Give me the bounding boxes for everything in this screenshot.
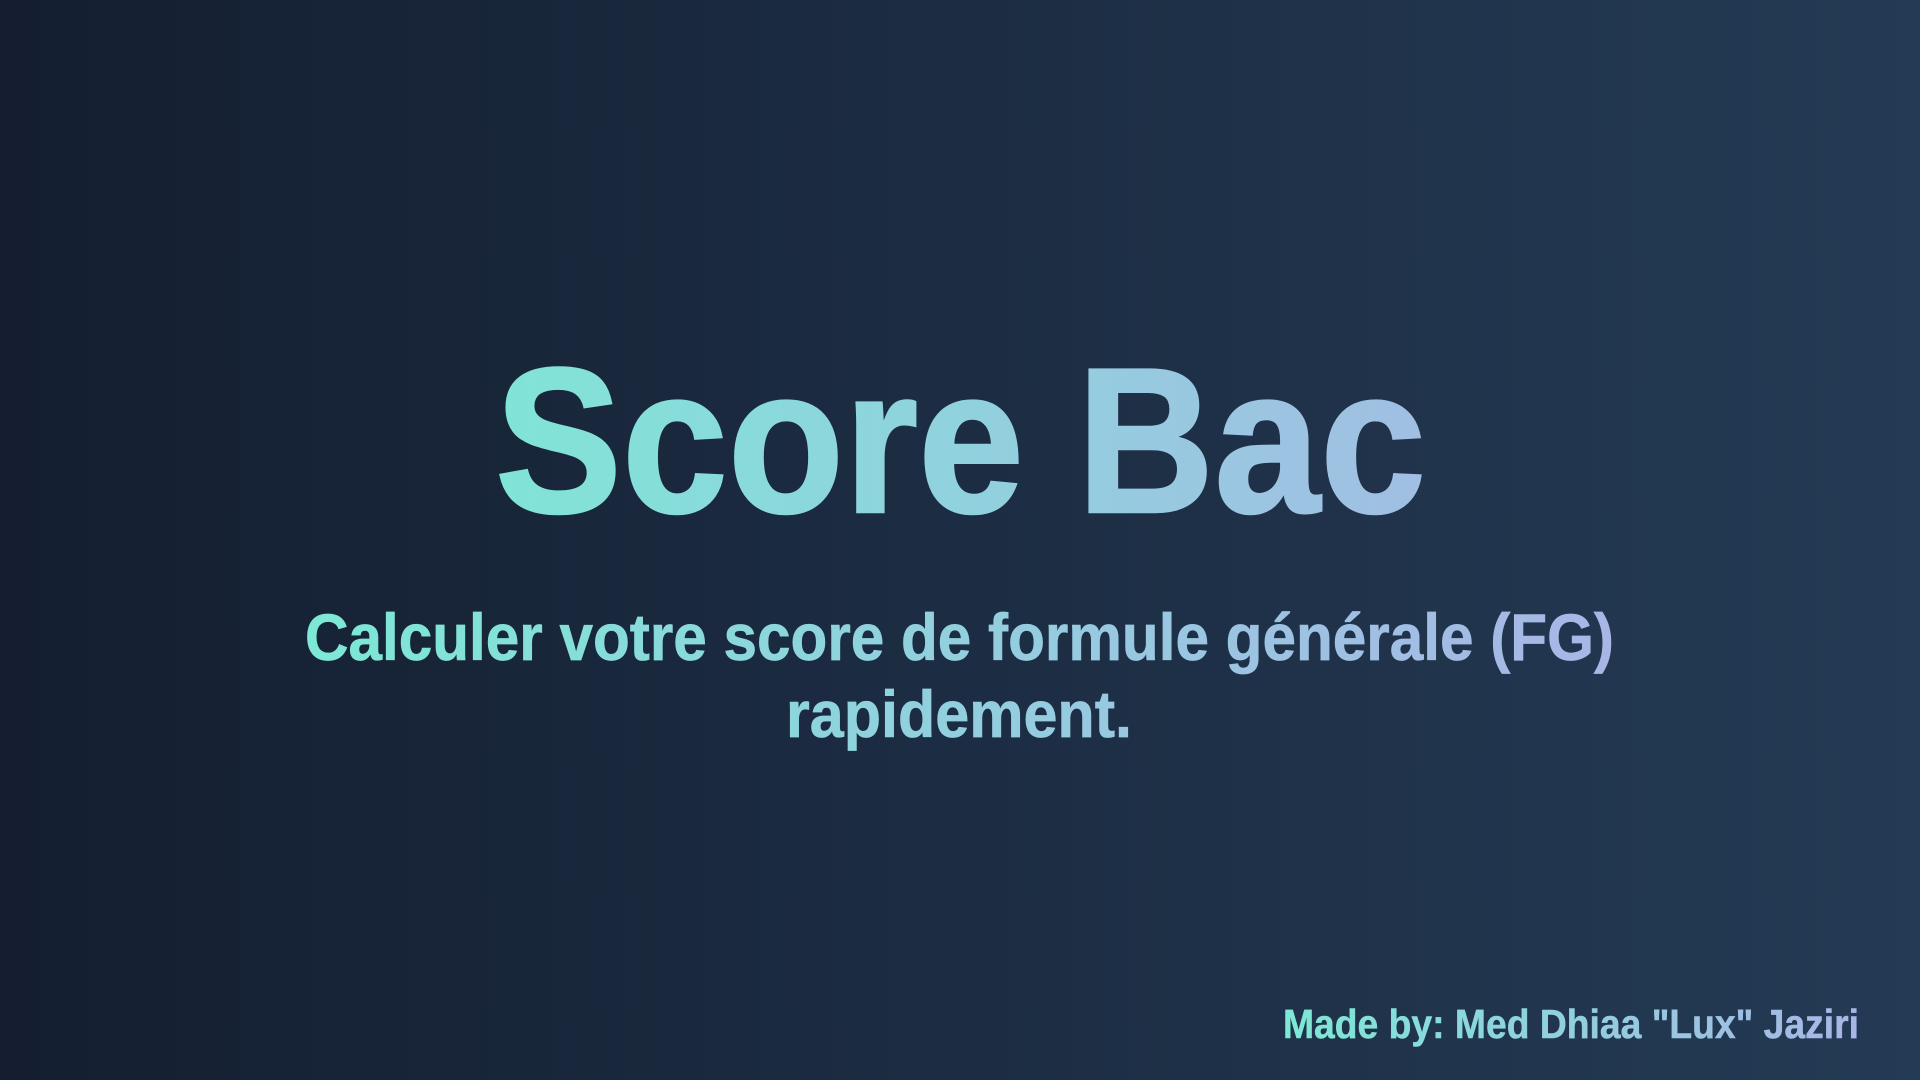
title: Score Bac bbox=[495, 325, 1426, 556]
footer credit: Made by: Med Dhiaa "Lux" Jaziri bbox=[1283, 1001, 1859, 1047]
subtitle: rapidement. bbox=[786, 677, 1132, 751]
subtitle: Calculer votre score de formule générale (FG) bbox=[305, 600, 1614, 674]
subtitle bbox=[305, 600, 1614, 751]
